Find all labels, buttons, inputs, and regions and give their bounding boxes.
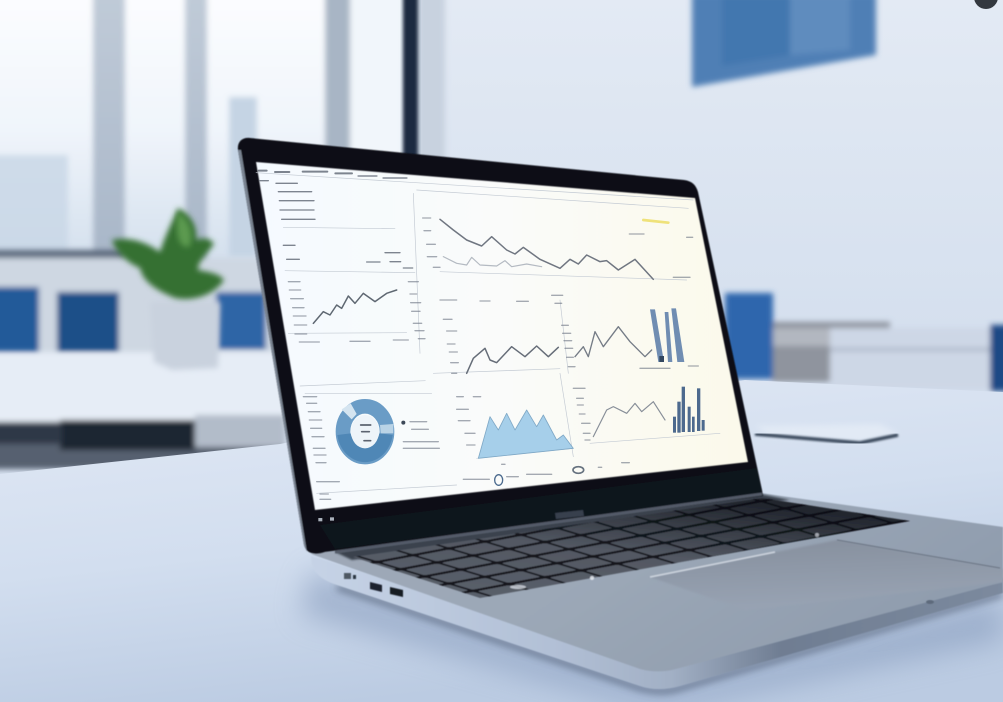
base front edge bbox=[311, 556, 1003, 689]
dashboard content bbox=[256, 171, 720, 521]
upper bar chart bbox=[650, 308, 684, 362]
laptop shadow bbox=[300, 570, 1003, 702]
left line chart bbox=[313, 290, 397, 323]
lower line chart bbox=[593, 402, 665, 437]
bezel logo bbox=[555, 510, 584, 519]
laptop base bbox=[311, 493, 1003, 689]
back cabinet with blue panels bbox=[0, 250, 287, 360]
status icon bbox=[495, 475, 503, 485]
dashboard screen bbox=[256, 162, 748, 510]
gauge icon bbox=[573, 467, 584, 473]
blue chair and right furniture bbox=[725, 293, 1003, 391]
laptop lid bbox=[238, 138, 763, 554]
axis labels bbox=[288, 218, 698, 499]
base top deck bbox=[311, 493, 1003, 671]
keyboard bbox=[353, 498, 910, 598]
lower bar chart bbox=[673, 387, 705, 433]
grid lines bbox=[256, 173, 720, 493]
yellow highlight label bbox=[643, 220, 668, 223]
lower bezel sheen bbox=[320, 468, 762, 549]
base notch bbox=[926, 600, 934, 604]
dark window column bbox=[403, 0, 418, 165]
icon: potted plant bbox=[112, 208, 224, 370]
keyboard hinge strip bbox=[335, 494, 790, 560]
trackpad bbox=[650, 540, 1003, 610]
donut legend icon bbox=[401, 421, 405, 425]
plant pot bbox=[150, 302, 220, 370]
lid left edge highlight bbox=[238, 150, 307, 552]
taskbar icons bbox=[318, 517, 334, 521]
window wall with mullions bbox=[0, 0, 445, 265]
hinge highlight bbox=[335, 494, 762, 552]
middle line chart bbox=[467, 346, 558, 373]
right line chart bbox=[575, 327, 652, 357]
notebook on desk bbox=[755, 424, 899, 443]
USB and side ports bbox=[344, 573, 403, 597]
plant foliage bbox=[112, 208, 224, 299]
lid bezel bbox=[238, 138, 763, 554]
area chart bbox=[478, 410, 573, 458]
secondary line chart bbox=[443, 257, 542, 267]
foreground table surface bbox=[0, 380, 1003, 702]
back table bbox=[0, 352, 295, 469]
donut chart bbox=[337, 403, 393, 462]
top line chart bbox=[440, 219, 653, 279]
menu labels bbox=[259, 171, 413, 268]
wall painting bbox=[692, 0, 876, 87]
trackpad highlight edge bbox=[650, 540, 1000, 577]
dark circle badge at top right bbox=[974, 0, 998, 9]
